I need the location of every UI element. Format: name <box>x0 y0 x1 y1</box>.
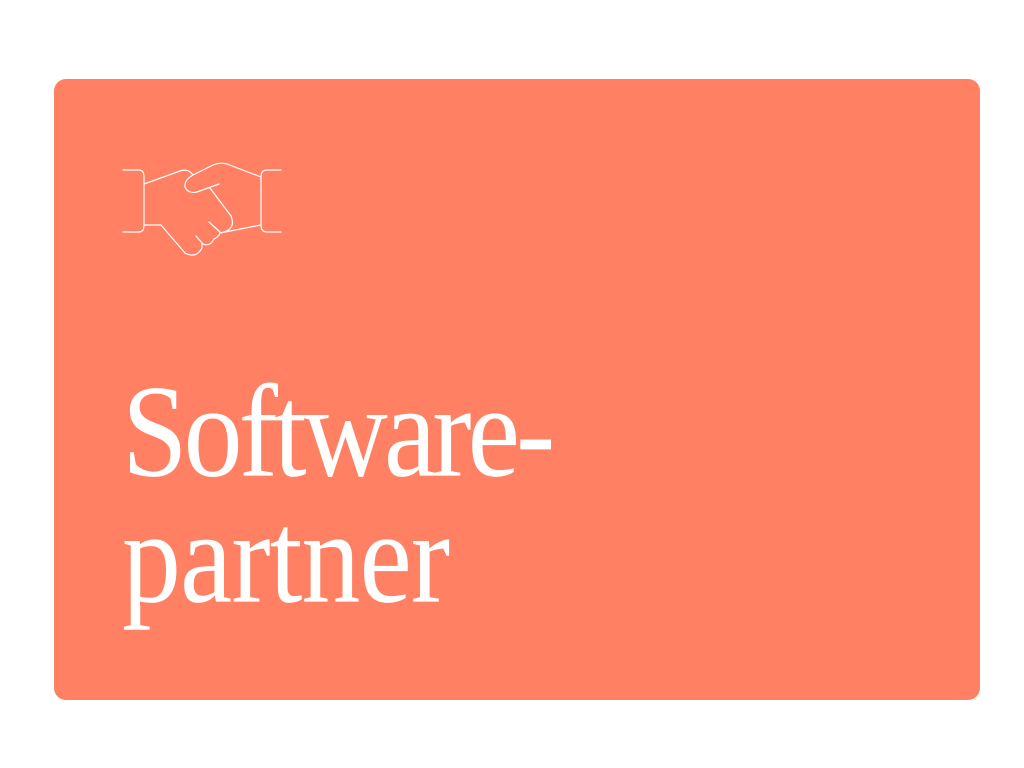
panel: card background <box>54 79 980 700</box>
icon: handshake <box>122 162 282 256</box>
title: partner: partner <box>122 484 449 631</box>
title: Software-: Software- <box>122 358 551 505</box>
